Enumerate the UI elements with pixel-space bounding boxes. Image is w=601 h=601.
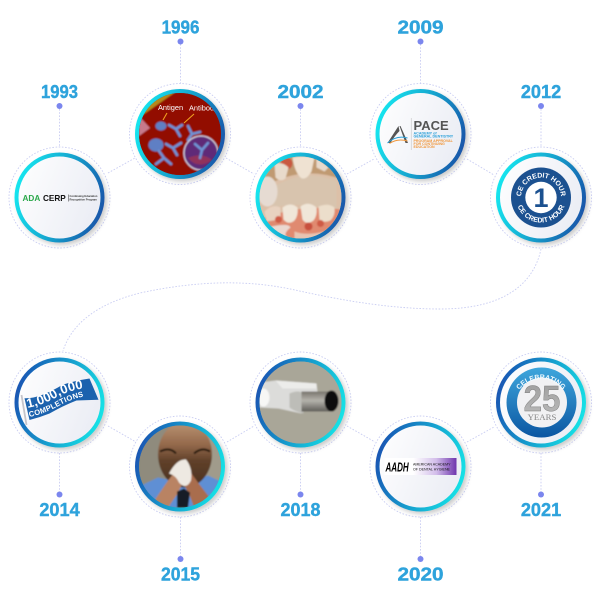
year: 2014: 2014 [39,499,80,520]
badge: 25 years: CELEBRATING [516,374,566,389]
logo: ADA CERP: ADA [22,194,40,203]
node: 2009 PACE logo [370,84,471,184]
flag: 1,000,000 completions [20,378,98,426]
year: 2009: 2009 [397,17,444,38]
badge: CE credit hour: 1 [533,183,549,213]
badge: CE credit hour [511,168,571,228]
logo: Academy of General Dentistry PACE: EDUCATION [414,145,435,149]
logo: AADH: AADH [385,461,409,475]
badge: 25 years: 25 [524,380,560,419]
logo: AADH: OF DENTAL HYGIENE [413,468,451,472]
year: 1996: 1996 [162,17,200,38]
node: 2014 one million completions flag [8,352,110,454]
illustration: antibodies [139,93,221,175]
year dots [56,38,544,562]
year: 2020: 2020 [397,564,444,585]
year: 2002: 2002 [277,82,324,103]
logo: ADA CERP [22,194,98,203]
logo: Academy of General Dentistry PACE: PACE [414,118,449,133]
logo: ADA CERP: Recognition Program [70,198,97,202]
node: 1996 antigen and antibody illustration [130,84,230,184]
logo: Academy of General Dentistry PACE [388,118,454,150]
node: 1993 ADA CERP logo [9,147,110,248]
node: 2018 x-ray tube photo [250,352,351,453]
label: Antibody: Antibody [189,104,218,112]
logo: Academy of General Dentistry PACE: GENERAL DENTISTRY [414,135,454,139]
badge: 25 years: YEARS [528,412,557,422]
flag: 1,000,000 completions: 1,000,000 [26,380,82,408]
logo: Academy of General Dentistry PACE: FOR CONTINUING [414,142,445,146]
logo: Academy of General Dentistry PACE: ACADEMY of [414,131,437,135]
logo: AADH: AMERICAN ACADEMY [413,463,451,467]
arrow: winding connector from 2012 to 2014 [63,249,541,351]
label: Antigen: Antigen [158,103,183,112]
year: 2012: 2012 [521,81,561,102]
year: 2018: 2018 [281,500,320,520]
photo: teeth and gums [258,156,342,238]
logo: AADH [384,458,456,475]
photo: man with tissue [139,422,221,508]
node: 2021 celebrating 25 years badge [490,352,592,454]
badge: CE credit hour: CE CREDIT HOUR [516,172,566,196]
photo: dental x-ray head [258,362,342,444]
node: 2020 American Academy of Dental Hygiene logo [370,416,471,517]
year: 2021: 2021 [521,499,561,520]
year: 1993: 1993 [41,81,78,102]
node: 2002 teeth photo [250,147,351,248]
node: 2012 CE credit hour badge [490,146,592,248]
logo: ADA CERP: CERP [43,194,66,203]
logo: ADA CERP: Continuing Education [70,194,98,198]
flag: 1,000,000 completions: COMPLETIONS [29,392,83,416]
node: 2015 man sneezing photo [130,416,230,517]
logo: Academy of General Dentistry PACE: PROGRAM APPROVAL [414,139,454,143]
badge: 25 years [506,368,576,438]
connectors: top row [60,44,541,175]
badge: CE credit hour: CE CREDIT HOUR [518,204,564,222]
connectors: bottom row [60,426,541,556]
year: 2015: 2015 [161,564,200,585]
